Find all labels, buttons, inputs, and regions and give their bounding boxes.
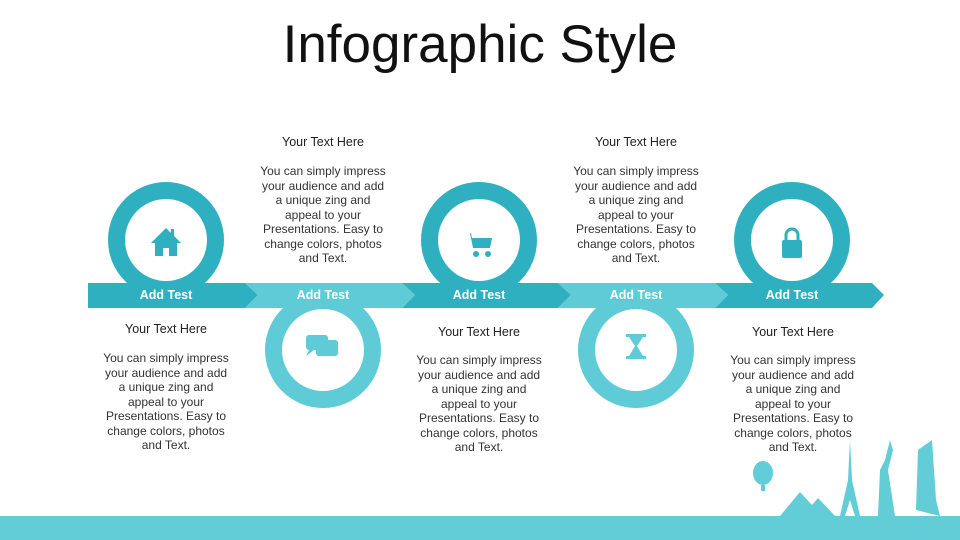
circle 3 xyxy=(421,182,537,298)
band labels: Add Test xyxy=(766,288,818,302)
band labels: Add Test xyxy=(610,288,662,302)
text block 2 xyxy=(260,135,386,265)
text: Your Text Here xyxy=(282,135,364,149)
text: and Text. xyxy=(299,251,347,265)
text: Your Text Here xyxy=(125,322,207,336)
circle 4 xyxy=(578,292,694,408)
text: Your Text Here xyxy=(752,325,834,339)
text: a unique zing and xyxy=(432,382,526,396)
text: a unique zing and xyxy=(119,380,213,394)
text: change colors, photos xyxy=(420,426,538,440)
text: and Text. xyxy=(455,440,503,454)
icon: hourglass xyxy=(626,334,646,359)
text: You can simply impress xyxy=(573,164,699,178)
text: change colors, photos xyxy=(107,424,225,438)
bottom strip xyxy=(0,516,960,540)
band labels xyxy=(140,288,818,302)
circle 2 xyxy=(265,292,381,408)
text: You can simply impress xyxy=(260,164,386,178)
text: a unique zing and xyxy=(276,193,370,207)
text: your audience and add xyxy=(262,178,384,192)
text: Presentations. Easy to xyxy=(419,411,539,425)
text: a unique zing and xyxy=(746,382,840,396)
text: your audience and add xyxy=(575,178,697,192)
text: appeal to your xyxy=(598,208,674,222)
text: change colors, photos xyxy=(264,236,382,250)
icon: cart xyxy=(466,233,492,257)
text: appeal to your xyxy=(441,396,517,410)
circle 5 xyxy=(734,182,850,298)
text block 3 xyxy=(416,325,542,454)
text: Presentations. Easy to xyxy=(106,409,226,423)
arrow band xyxy=(88,283,884,308)
text block 4 xyxy=(573,135,699,265)
text block 1 xyxy=(103,322,229,452)
band labels: Add Test xyxy=(453,288,505,302)
text: You can simply impress xyxy=(103,351,229,365)
band labels: Add Test xyxy=(140,288,192,302)
text: You can simply impress xyxy=(416,353,542,367)
text block 5 xyxy=(730,325,856,454)
icon: house xyxy=(151,228,181,256)
text: Your Text Here xyxy=(438,325,520,339)
band labels: Add Test xyxy=(297,288,349,302)
text: and Text. xyxy=(142,438,190,452)
text: and Text. xyxy=(612,251,660,265)
text: change colors, photos xyxy=(577,236,695,250)
landmarks silhouette xyxy=(753,440,940,516)
icon: chat xyxy=(306,335,338,356)
text: Presentations. Easy to xyxy=(576,222,696,236)
title: Infographic Style xyxy=(283,15,677,74)
text: a unique zing and xyxy=(589,193,683,207)
text: change colors, photos xyxy=(734,426,852,440)
text: appeal to your xyxy=(128,394,204,408)
text: your audience and add xyxy=(418,368,540,382)
text: Presentations. Easy to xyxy=(733,411,853,425)
text: your audience and add xyxy=(732,368,854,382)
circle 1 xyxy=(108,182,224,298)
icon: lock xyxy=(782,229,802,258)
text: Presentations. Easy to xyxy=(263,222,383,236)
text: and Text. xyxy=(769,440,817,454)
text: appeal to your xyxy=(755,396,831,410)
text: appeal to your xyxy=(285,208,361,222)
text: You can simply impress xyxy=(730,353,856,367)
text: Your Text Here xyxy=(595,135,677,149)
text: your audience and add xyxy=(105,366,227,380)
